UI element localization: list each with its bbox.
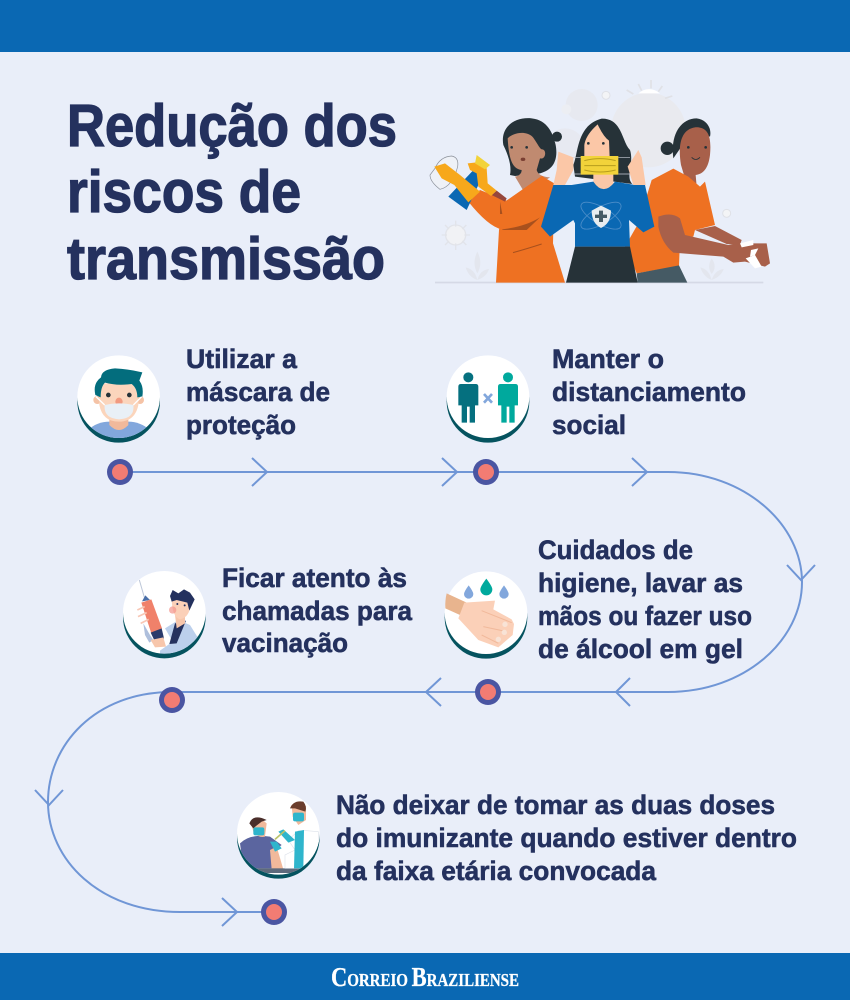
illustration: three people practicing prevention — [430, 80, 770, 283]
text: step 4 — [222, 563, 412, 658]
text: step 4: chamadas para — [222, 596, 412, 626]
text: step 3: de álcool em gel — [538, 634, 743, 664]
title — [67, 93, 397, 292]
text: step 2: distanciamento — [552, 377, 746, 407]
text: step 1: máscara de — [186, 377, 330, 407]
title: riscos de — [67, 159, 301, 225]
step 4: vaccination calls — [123, 563, 412, 658]
text: step 1 — [186, 344, 330, 440]
background shapes — [435, 80, 763, 283]
text: step 1: proteção — [186, 410, 296, 440]
icon: patient receiving vaccine — [237, 792, 320, 879]
icon: two people apart — [447, 355, 529, 443]
step 1: mask — [77, 344, 330, 443]
text: step 1: Utilizar a — [186, 344, 297, 374]
text: step 3: mãos ou fazer uso — [538, 601, 752, 631]
path line connecting steps — [48, 472, 802, 912]
footer logo: CORREIO BRAZILIENSE — [331, 962, 519, 992]
icon: doctor with syringe — [123, 571, 206, 658]
title: transmissão — [67, 226, 385, 292]
text: step 3: Cuidados de — [538, 535, 693, 565]
person: right man washing hands — [625, 118, 770, 283]
title: Redução dos — [67, 93, 397, 159]
arrows along path — [35, 458, 815, 926]
step 3: hygiene — [445, 535, 752, 664]
person: central woman with mask — [541, 119, 654, 283]
text: step 2: social — [552, 410, 626, 440]
text: step 5: da faixa etária convocada — [336, 856, 656, 886]
text: step 2 — [552, 344, 746, 440]
top bar — [0, 0, 850, 52]
step 2: distancing — [447, 344, 746, 443]
text: step 4: vacinação — [222, 628, 348, 658]
icon: masked face — [77, 355, 160, 443]
footer bar — [0, 953, 850, 1000]
text: step 2: Manter o — [552, 344, 664, 374]
step 5: two doses — [237, 790, 797, 886]
text: step 4: Ficar atento às — [222, 563, 407, 593]
text: step 5: Não deixar de tomar as duas doses — [336, 790, 775, 820]
step nodes — [107, 459, 501, 925]
text: step 3 — [538, 535, 752, 664]
text: step 5 — [336, 790, 797, 886]
person: left woman with spray bottle — [430, 118, 565, 283]
text: step 5: do imunizante quando estiver dentro — [336, 823, 797, 853]
text: step 3: higiene, lavar as — [538, 568, 743, 598]
icon: hand and water drops — [445, 571, 527, 659]
